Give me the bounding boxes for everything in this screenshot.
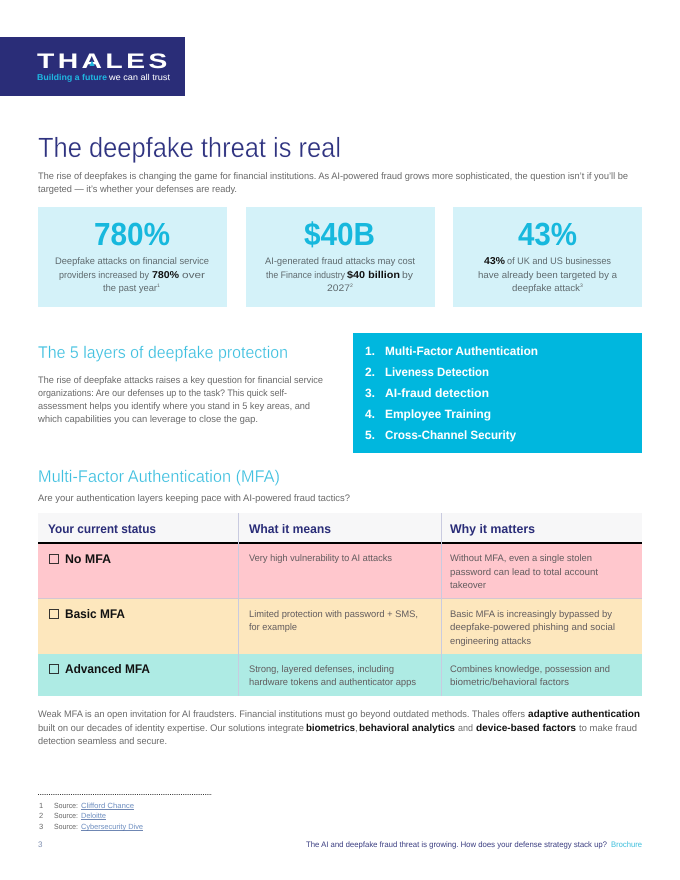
row: No MFA: No MFA bbox=[65, 552, 111, 566]
panel: stat 780%: over bbox=[182, 270, 205, 281]
row: No MFA: password can lead to total account bbox=[450, 567, 598, 578]
text: closing paragraph: built on our decades of identity expertise. Our solutions integrate bbox=[38, 723, 304, 734]
panel: stat $40B: $40 billion bbox=[347, 270, 400, 281]
footnotes: sources: 1 bbox=[39, 801, 43, 810]
text: closing paragraph: adaptive authentication bbox=[528, 709, 640, 720]
row: No MFA bbox=[50, 552, 598, 591]
panel: 5 layers list: AI-fraud detection bbox=[385, 386, 489, 400]
row: Advanced MFA: biometric/behavioral factors bbox=[450, 677, 569, 688]
row: Basic MFA: Limited protection with password + SMS, bbox=[249, 609, 418, 620]
footnotes: sources bbox=[39, 801, 143, 831]
footnotes: sources: 2 bbox=[39, 811, 43, 820]
footnotes: sources: Cybersecurity Dive bbox=[81, 822, 143, 831]
panel: 5 layers list: 2. bbox=[365, 365, 375, 379]
text: closing paragraph: and bbox=[458, 723, 473, 734]
panel: stat $40B: by bbox=[402, 270, 413, 281]
logo: Thales banner: THALES bbox=[37, 50, 171, 73]
row: Advanced MFA bbox=[50, 662, 610, 688]
text: closing paragraph: , bbox=[355, 723, 358, 734]
panel: stat 780%: providers increased by bbox=[59, 270, 149, 281]
text: 5 layers description: The rise of deepfake attacks raises a key question for financial service bbox=[38, 375, 323, 386]
footnotes: sources: Source: bbox=[54, 811, 78, 820]
text: 5 layers description bbox=[37, 375, 323, 425]
row: Basic MFA: deepfake-powered phishing and social bbox=[450, 622, 615, 633]
footnotes: sources: Source: bbox=[54, 822, 78, 831]
panel: stat $40B bbox=[246, 207, 435, 307]
panel: stat 780% bbox=[38, 207, 227, 307]
panel: stat $40B: the Finance industry bbox=[266, 270, 345, 281]
panel: 5 layers list: 1. bbox=[365, 344, 375, 358]
footer text: The AI and deepfake fraud threat is growing. How does your defense strategy stack up? bbox=[306, 840, 608, 849]
intro text: The rise of deepfakes is changing the game for financial institutions. As AI-powered fraud grows more sophisticated, the question isn’t if you’ll be bbox=[38, 171, 628, 182]
panel: stat 780%: Deepfake attacks on financial service bbox=[55, 256, 209, 267]
panel: 5 layers list: Liveness Detection bbox=[385, 365, 489, 379]
table header: Why it matters bbox=[450, 522, 535, 536]
text: MFA question: Are your authentication layers keeping pace with AI-powered fraud tactics? bbox=[38, 493, 350, 504]
panel: stat $40B: 2 bbox=[350, 283, 353, 289]
footnotes: sources: Deloitte bbox=[81, 811, 106, 820]
table header: Your current status bbox=[48, 522, 156, 536]
panel: 5 layers list: 3. bbox=[365, 386, 375, 400]
panel: stat 43%: 43% bbox=[518, 216, 577, 252]
text: 5 layers description: which capabilities you can leverage to close the gap. bbox=[37, 414, 258, 425]
panel: stat 43% bbox=[453, 207, 642, 307]
row: Basic MFA bbox=[50, 607, 615, 647]
footnotes: sources: Clifford Chance bbox=[81, 801, 134, 810]
row: Advanced MFA: Advanced MFA bbox=[65, 662, 150, 676]
footnotes: sources: 3 bbox=[39, 822, 43, 831]
row: Advanced MFA: Strong, layered defenses, including bbox=[249, 664, 394, 675]
intro text: targeted — it’s whether your defenses are ready. bbox=[38, 184, 237, 195]
text: closing paragraph bbox=[38, 709, 640, 747]
row: Basic MFA: engineering attacks bbox=[450, 636, 531, 647]
panel: stat 780%: 1 bbox=[157, 283, 160, 289]
text: closing paragraph: device-based factors bbox=[476, 723, 576, 734]
heading: 5 layers: The 5 layers of deepfake protection bbox=[38, 343, 288, 362]
panel: stat 780%: 780% bbox=[152, 270, 179, 281]
footer text: Brochure bbox=[611, 840, 643, 849]
panel: stat $40B: 2027 bbox=[327, 283, 350, 294]
panel: stat 43%: have already been targeted by a bbox=[478, 270, 618, 281]
panel: stat $40B: $40B bbox=[304, 216, 375, 252]
panel: stat 43%: of UK and US businesses bbox=[507, 256, 611, 267]
row: Basic MFA: Basic MFA bbox=[65, 607, 125, 621]
row: Advanced MFA: Combines knowledge, possession and bbox=[450, 664, 610, 675]
row: No MFA: takeover bbox=[450, 580, 486, 591]
panel: stat 43%: 43% bbox=[484, 256, 505, 267]
text: 5 layers description: assessment helps you identify where you stand in 5 key areas, and bbox=[38, 401, 310, 412]
text: closing paragraph: Weak MFA is an open invitation for AI fraudsters. Financial institutions must go beyond outdated methods. Thales offers bbox=[38, 709, 525, 720]
text: closing paragraph: behavioral analytics bbox=[359, 723, 455, 734]
panel: 5 layers list: Multi-Factor Authentication bbox=[385, 344, 538, 358]
text: closing paragraph: detection seamless and secure. bbox=[38, 736, 167, 747]
logo: Thales banner: Building a future bbox=[37, 72, 107, 82]
table header bbox=[48, 522, 535, 536]
table: MFA status bbox=[38, 513, 642, 696]
text: closing paragraph: biometrics bbox=[306, 723, 355, 734]
row: No MFA: Without MFA, even a single stolen bbox=[450, 553, 592, 564]
heading: MFA: Multi-Factor Authentication (MFA) bbox=[38, 467, 280, 486]
intro text bbox=[38, 171, 628, 195]
page number: 3 bbox=[38, 840, 43, 849]
panel: 5 layers list: 5. bbox=[365, 428, 375, 442]
panel: stat 43%: deepfake attack bbox=[512, 283, 580, 294]
text: 5 layers description: organizations: Are our defenses up to the task? This quick self- bbox=[38, 388, 287, 399]
row: Basic MFA: Basic MFA is increasingly bypassed by bbox=[450, 609, 612, 620]
logo: Thales banner bbox=[0, 37, 185, 96]
text: closing paragraph: to make fraud bbox=[579, 723, 637, 734]
panel: stat 780%: the past year bbox=[103, 283, 157, 294]
table header: What it means bbox=[249, 522, 331, 536]
panel: stat 43%: 3 bbox=[580, 283, 583, 289]
panel: 5 layers list: Cross-Channel Security bbox=[385, 428, 516, 442]
footnotes: sources: Source: bbox=[54, 801, 78, 810]
panel: 5 layers list: 4. bbox=[365, 407, 375, 421]
row: No MFA: Very high vulnerability to AI attacks bbox=[249, 553, 392, 564]
panel: 5 layers list: Employee Training bbox=[385, 407, 491, 421]
row: Advanced MFA: hardware tokens and authenticator apps bbox=[249, 677, 416, 688]
panel: stat $40B: AI-generated fraud attacks may cost bbox=[265, 256, 415, 267]
row: Basic MFA: for example bbox=[249, 622, 297, 633]
panel: 5 layers list bbox=[353, 333, 642, 453]
title: The deepfake threat is real bbox=[38, 132, 341, 163]
panel: stat 780%: 780% bbox=[94, 216, 170, 252]
logo: Thales banner: we can all trust bbox=[108, 72, 171, 82]
